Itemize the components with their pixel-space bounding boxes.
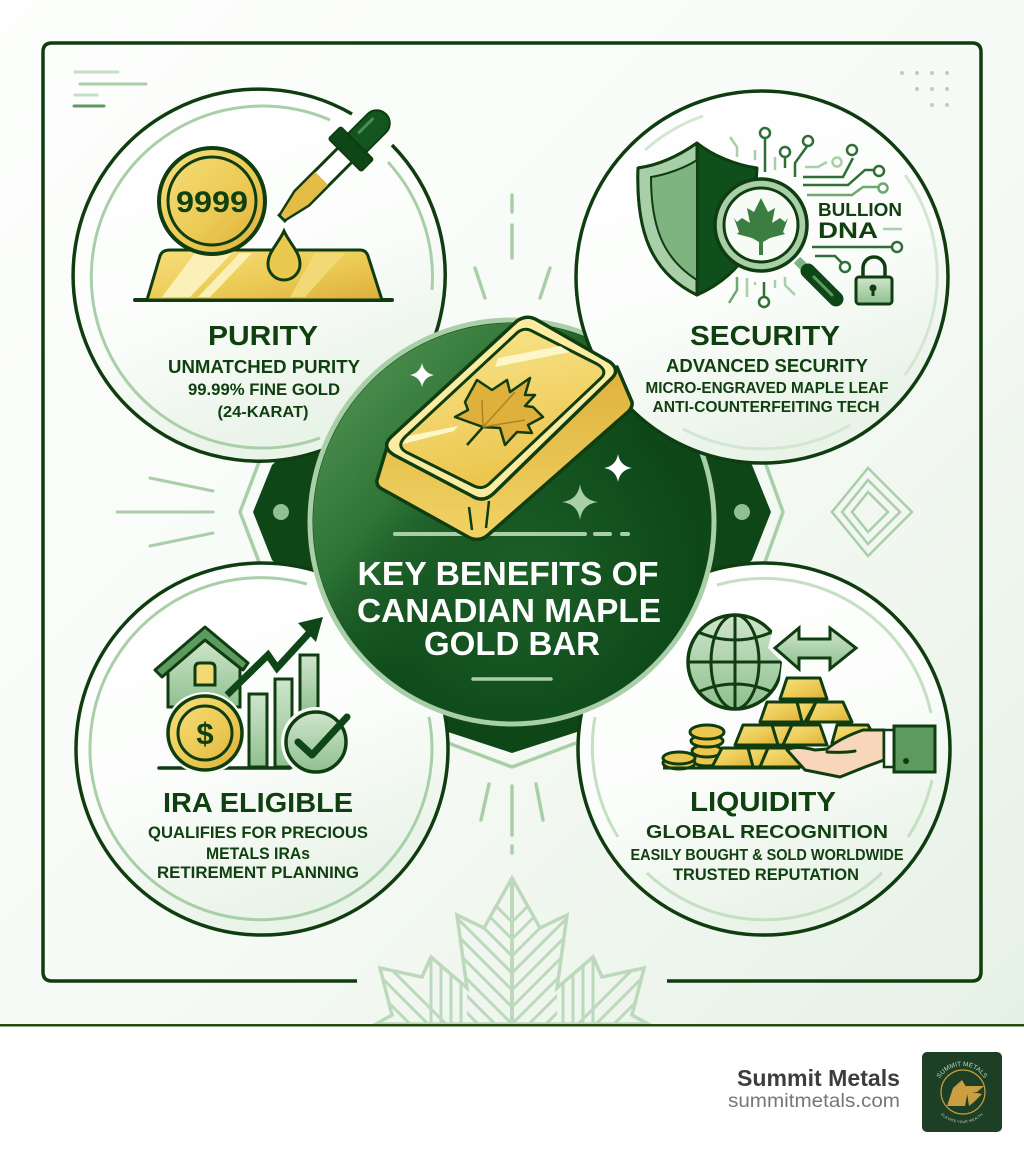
text: liquidity lines: GLOBAL RECOGNITION	[646, 822, 888, 842]
text: IRA lines: METALS IRAs	[206, 844, 310, 863]
icon: globe	[688, 615, 800, 712]
text: security lines: MICRO-ENGRAVED MAPLE LEAF	[646, 380, 889, 397]
footer brand text	[728, 1065, 900, 1112]
icon: check badge	[281, 707, 351, 777]
icon: single coin	[663, 752, 695, 769]
heading: IRA eligible: IRA ELIGIBLE	[163, 787, 353, 818]
text: IRA lines: QUALIFIES FOR PRECIOUS	[148, 823, 368, 842]
text: security lines: ADVANCED SECURITY	[666, 356, 868, 376]
icon: house	[155, 627, 248, 707]
decorative line below bar	[395, 532, 628, 536]
decoration: left rays	[117, 478, 213, 546]
icon: shield	[638, 143, 757, 295]
icon: circuit traces	[729, 128, 902, 307]
icon: double arrow	[775, 628, 856, 669]
bar chart	[249, 655, 318, 767]
sparkles	[410, 363, 632, 520]
icon: rising arrow	[227, 617, 323, 695]
heading: purity: PURITY	[208, 320, 318, 351]
icon: gold drop	[268, 231, 300, 280]
hexagon dot right	[734, 504, 750, 520]
text: purity lines: (24-KARAT)	[218, 404, 308, 421]
icon: stacked gold bars	[712, 678, 878, 767]
title: CANADIAN MAPLE	[357, 592, 661, 629]
footer logo: SUMMIT METALS	[936, 1062, 988, 1078]
outer frame	[43, 43, 981, 981]
dark hexagon behind centre	[253, 440, 771, 753]
text: purity lines	[168, 357, 360, 421]
decoration: right nested diamonds	[832, 468, 912, 556]
panel: purity	[73, 89, 447, 462]
pale chevron outline around the hexagon	[240, 462, 783, 767]
footer brand text: summitmetals.com	[728, 1091, 900, 1112]
icon: dollar coin	[164, 692, 246, 774]
decoration: top rays above centre	[475, 195, 550, 298]
title: KEY BENEFITS OF	[358, 555, 658, 592]
text: IRA lines	[148, 823, 368, 882]
text: liquidity lines	[630, 822, 904, 884]
title underline	[473, 677, 551, 681]
icon: dropper	[266, 98, 402, 234]
text: bullion dna: DNA	[818, 218, 878, 243]
decorative maple leaf watermark	[372, 874, 652, 1024]
icon: 9999 coin	[159, 148, 265, 254]
text: purity lines: UNMATCHED PURITY	[168, 357, 360, 377]
footer logo	[922, 1052, 1002, 1132]
icon: central gold bar with maple leaf	[377, 317, 632, 539]
footer logo: ELEVATE YOUR WEALTH	[941, 1113, 983, 1124]
panel: liquidity	[578, 563, 950, 935]
panel: security	[576, 91, 948, 463]
decoration: top-left lines	[74, 72, 146, 106]
text: bullion dna: BULLION	[818, 200, 902, 220]
text: liquidity lines: EASILY BOUGHT & SOLD WORLDWIDE	[630, 847, 904, 864]
footer divider	[0, 1024, 1024, 1026]
text: purity lines: 99.99% FINE GOLD	[188, 381, 340, 399]
text: IRA lines: RETIREMENT PLANNING	[157, 863, 359, 882]
text: liquidity lines: TRUSTED REPUTATION	[673, 866, 859, 884]
baseline	[159, 766, 290, 770]
decoration: bottom rays below centre	[481, 784, 543, 853]
heading: security: SECURITY	[690, 320, 840, 351]
panel: centre badge	[310, 320, 714, 724]
hexagon dot left	[273, 504, 289, 520]
icon: dollar coin: $	[196, 716, 214, 751]
title: GOLD BAR	[424, 625, 600, 662]
icon: hand with cuff	[663, 726, 935, 777]
text: security lines: ANTI-COUNTERFEITING TECH	[652, 399, 880, 416]
footer brand text: Summit Metals	[737, 1065, 900, 1091]
footer background	[0, 1026, 1024, 1154]
decoration: top-right dots	[900, 71, 949, 107]
title	[357, 555, 661, 662]
icon: gold bar	[135, 250, 392, 300]
icon: magnifying glass	[715, 179, 836, 299]
text: bullion dna	[818, 200, 902, 243]
panel: IRA eligible	[76, 563, 448, 935]
text: security lines	[646, 356, 889, 416]
icon: 9999 coin: 9999	[176, 186, 248, 219]
icon: gold coin stack	[690, 725, 724, 766]
heading: liquidity: LIQUIDITY	[690, 786, 836, 817]
icon: padlock	[856, 257, 892, 304]
